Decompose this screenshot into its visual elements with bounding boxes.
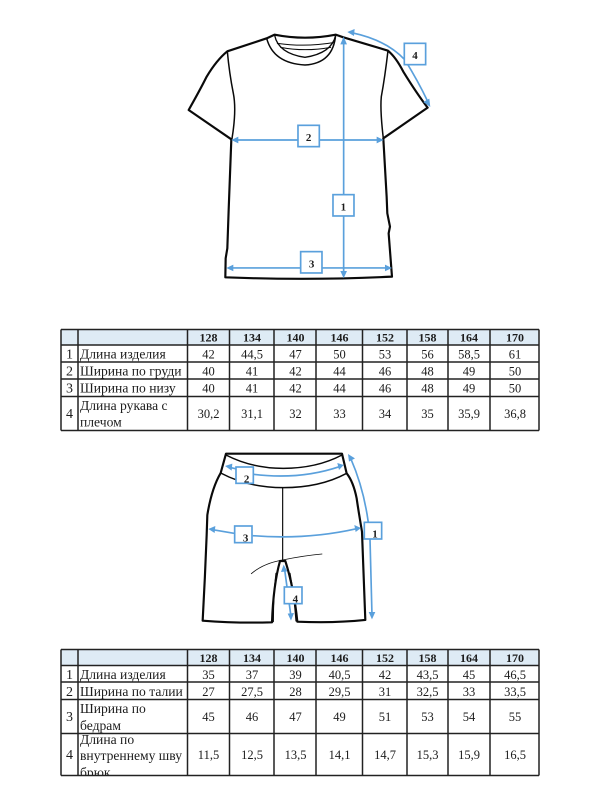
row: Длина изделия: 58,5 <box>458 348 480 362</box>
table column headers <box>200 330 524 344</box>
label box 4: 4 <box>412 50 418 62</box>
label box 2 <box>298 125 319 147</box>
row: Ширина по груди: 49 <box>463 364 475 378</box>
label box 4 <box>284 587 302 606</box>
row: Ширина по груди <box>66 364 521 380</box>
row: Длина рукава с плечом: плечом <box>80 414 122 430</box>
table column headers: 152 <box>376 651 394 665</box>
row 4 values: 15,3 <box>417 748 438 762</box>
row: Длина изделия <box>66 346 521 362</box>
row: Ширина по бедрам: 47 <box>289 710 302 724</box>
row: Ширина по низу: 40 <box>202 382 215 396</box>
row: Ширина по талии: 27,5 <box>241 685 263 699</box>
row: Длина изделия: 40,5 <box>329 668 350 682</box>
row: Длина рукава с плечом: Длина рукава с <box>80 398 168 413</box>
row: Длина рукава с плечом: 30,2 <box>198 407 219 421</box>
measurement arrow 1: length <box>348 454 375 619</box>
row: Ширина по талии: 33,5 <box>504 685 526 699</box>
measurement arrow 2: chest <box>231 137 384 143</box>
table column headers: 134 <box>243 651 261 665</box>
label box 4: 4 <box>293 594 299 606</box>
label box 3 <box>301 252 322 273</box>
row: Длина изделия: 44,5 <box>241 348 263 362</box>
row: Ширина по низу: 49 <box>463 382 475 396</box>
table column headers: 134 <box>243 330 261 344</box>
shorts diagram <box>203 454 382 623</box>
table row 4 label: внутреннему шву <box>80 748 182 763</box>
row: Ширина по низу: 46 <box>379 382 391 396</box>
row 4 values <box>66 748 526 763</box>
row: Ширина по груди: 46 <box>379 364 391 378</box>
row: Ширина по низу <box>66 380 521 396</box>
row: Длина рукава с плечом: 33 <box>333 407 346 421</box>
table column headers <box>200 651 524 665</box>
table: t-shirt sizes <box>61 330 539 430</box>
label box 2: 2 <box>244 473 250 485</box>
label box 3: 3 <box>243 533 249 545</box>
row: Ширина по бедрам: 53 <box>421 710 434 724</box>
row: Длина изделия: 1 <box>66 348 73 362</box>
row: Ширина по талии <box>66 684 526 700</box>
row: Длина изделия: 46,5 <box>504 668 526 682</box>
row: Длина изделия: 39 <box>289 668 302 682</box>
table column headers: 158 <box>418 330 436 344</box>
measurement arrow 2: waist <box>225 463 344 476</box>
row: Ширина по бедрам: 55 <box>509 710 521 724</box>
row: Ширина по талии: 28 <box>289 685 302 699</box>
row: Ширина по талии: Ширина по талии <box>80 684 183 699</box>
row 4 values: 14,1 <box>329 748 350 762</box>
row: Ширина по бедрам: бедрам <box>80 718 121 733</box>
row: Ширина по талии: 27 <box>202 685 215 699</box>
row 4 values: 16,5 <box>504 748 526 762</box>
row: Ширина по низу: 44 <box>333 382 346 396</box>
row: Ширина по низу: 41 <box>246 382 258 396</box>
row 4 values: 4 <box>66 748 73 763</box>
t-shirt outline <box>189 35 428 279</box>
row: Длина изделия: 42 <box>379 668 391 682</box>
table header shading <box>61 330 539 345</box>
row 4 values: 13,5 <box>285 748 306 762</box>
row: Длина рукава с плечом: 35,9 <box>458 407 480 421</box>
row 4 values: 14,7 <box>374 748 396 762</box>
row: Длина изделия: 1 <box>66 668 73 683</box>
label box 3: 3 <box>309 258 315 270</box>
row: Длина рукава с плечом: 32 <box>289 407 302 421</box>
row: Длина изделия <box>66 667 526 683</box>
label box 1 <box>364 522 382 541</box>
row: Ширина по талии: 32,5 <box>417 685 438 699</box>
row: Длина рукава с плечом: 36,8 <box>504 407 526 421</box>
row: Длина изделия: 42 <box>202 348 215 362</box>
label box 1: 1 <box>372 529 378 541</box>
row: Длина изделия: Длина изделия <box>80 346 166 362</box>
row: Длина изделия: 56 <box>421 348 434 362</box>
table column headers: 146 <box>330 330 348 344</box>
row: Ширина по бедрам: Ширина по <box>80 701 146 716</box>
row: Ширина по низу: 48 <box>421 382 434 396</box>
measurement arrow 3: hips <box>208 525 361 537</box>
row: Ширина по бедрам: 45 <box>202 710 215 724</box>
label box 2 <box>236 467 253 485</box>
row: Ширина по груди: 42 <box>289 364 302 378</box>
row: Длина изделия: 45 <box>463 668 475 682</box>
row: Ширина по груди: 41 <box>246 364 258 378</box>
row: Ширина по груди: 50 <box>509 364 521 378</box>
table row 4 label: брюк <box>80 765 111 780</box>
table row 4 label: Длина по <box>80 732 134 747</box>
table column headers: 152 <box>376 330 394 344</box>
table: shorts sizes <box>61 650 539 780</box>
table column headers: 170 <box>506 330 524 344</box>
label box 4 <box>404 43 426 65</box>
table column headers: 146 <box>330 651 348 665</box>
table column headers: 158 <box>418 651 436 665</box>
row: Ширина по низу: Ширина по низу <box>80 380 176 396</box>
row: Ширина по бедрам: 51 <box>379 710 391 724</box>
row: Ширина по груди: 2 <box>66 364 73 380</box>
table column headers: 164 <box>460 330 478 344</box>
row: Ширина по бедрам: 46 <box>246 710 258 724</box>
row: Длина изделия: 37 <box>246 668 258 682</box>
row: Ширина по низу: 42 <box>289 382 302 396</box>
row: Ширина по талии: 31 <box>379 685 391 699</box>
t-shirt diagram <box>189 29 430 279</box>
row: Ширина по груди: Ширина по груди <box>80 364 182 378</box>
table column headers: 170 <box>506 651 524 665</box>
row: Ширина по бедрам <box>66 701 521 733</box>
label box 1 <box>333 195 354 216</box>
label box 1: 1 <box>341 202 346 214</box>
row: Длина рукава с плечом: 34 <box>379 407 392 421</box>
table column headers: 128 <box>200 651 218 665</box>
row: Длина рукава с плечом <box>66 398 526 430</box>
table row 4 label <box>80 732 182 780</box>
row: Ширина по груди: 48 <box>421 364 434 378</box>
shorts outline <box>203 454 365 623</box>
row: Длина рукава с плечом: 4 <box>66 407 73 422</box>
table column headers: 140 <box>286 330 304 344</box>
table grid <box>61 650 539 776</box>
row: Ширина по низу: 50 <box>509 382 521 396</box>
table column headers: 140 <box>286 651 304 665</box>
row: Ширина по талии: 33 <box>463 685 475 699</box>
measurement arrow 4: inseam <box>281 565 294 621</box>
row: Длина изделия: 53 <box>379 348 391 362</box>
row: Длина изделия: 35 <box>202 668 215 682</box>
measurement arrow 1: length <box>340 37 347 278</box>
row: Длина рукава с плечом: 31,1 <box>241 407 263 421</box>
measurement arrow 4: sleeve <box>347 29 430 107</box>
row: Ширина по талии: 29,5 <box>329 685 350 699</box>
row: Ширина по бедрам: 3 <box>66 710 73 725</box>
row 4 values: 11,5 <box>198 748 219 762</box>
row: Ширина по талии: 2 <box>66 685 73 700</box>
row: Длина изделия: 50 <box>333 348 346 362</box>
measurement arrow 3: hem <box>226 265 392 271</box>
table column headers: 164 <box>460 651 478 665</box>
row: Длина изделия: 43,5 <box>417 668 438 682</box>
row: Ширина по груди: 40 <box>202 364 215 378</box>
table column headers: 128 <box>200 330 218 344</box>
row: Ширина по бедрам: 54 <box>463 710 476 724</box>
label box 2: 2 <box>306 132 312 144</box>
row: Ширина по низу: 3 <box>66 382 73 396</box>
row: Ширина по груди: 44 <box>333 364 346 378</box>
label box 3 <box>235 526 252 545</box>
row: Ширина по бедрам: 49 <box>333 710 346 724</box>
row: Длина изделия: 61 <box>509 348 521 362</box>
table header shading <box>61 650 539 666</box>
row 4 values: 15,9 <box>458 748 480 762</box>
row 4 values: 12,5 <box>241 748 263 762</box>
row: Длина рукава с плечом: 35 <box>421 407 434 421</box>
table grid <box>61 330 539 430</box>
row: Длина изделия: 47 <box>289 348 302 362</box>
row: Длина изделия: Длина изделия <box>80 667 166 682</box>
